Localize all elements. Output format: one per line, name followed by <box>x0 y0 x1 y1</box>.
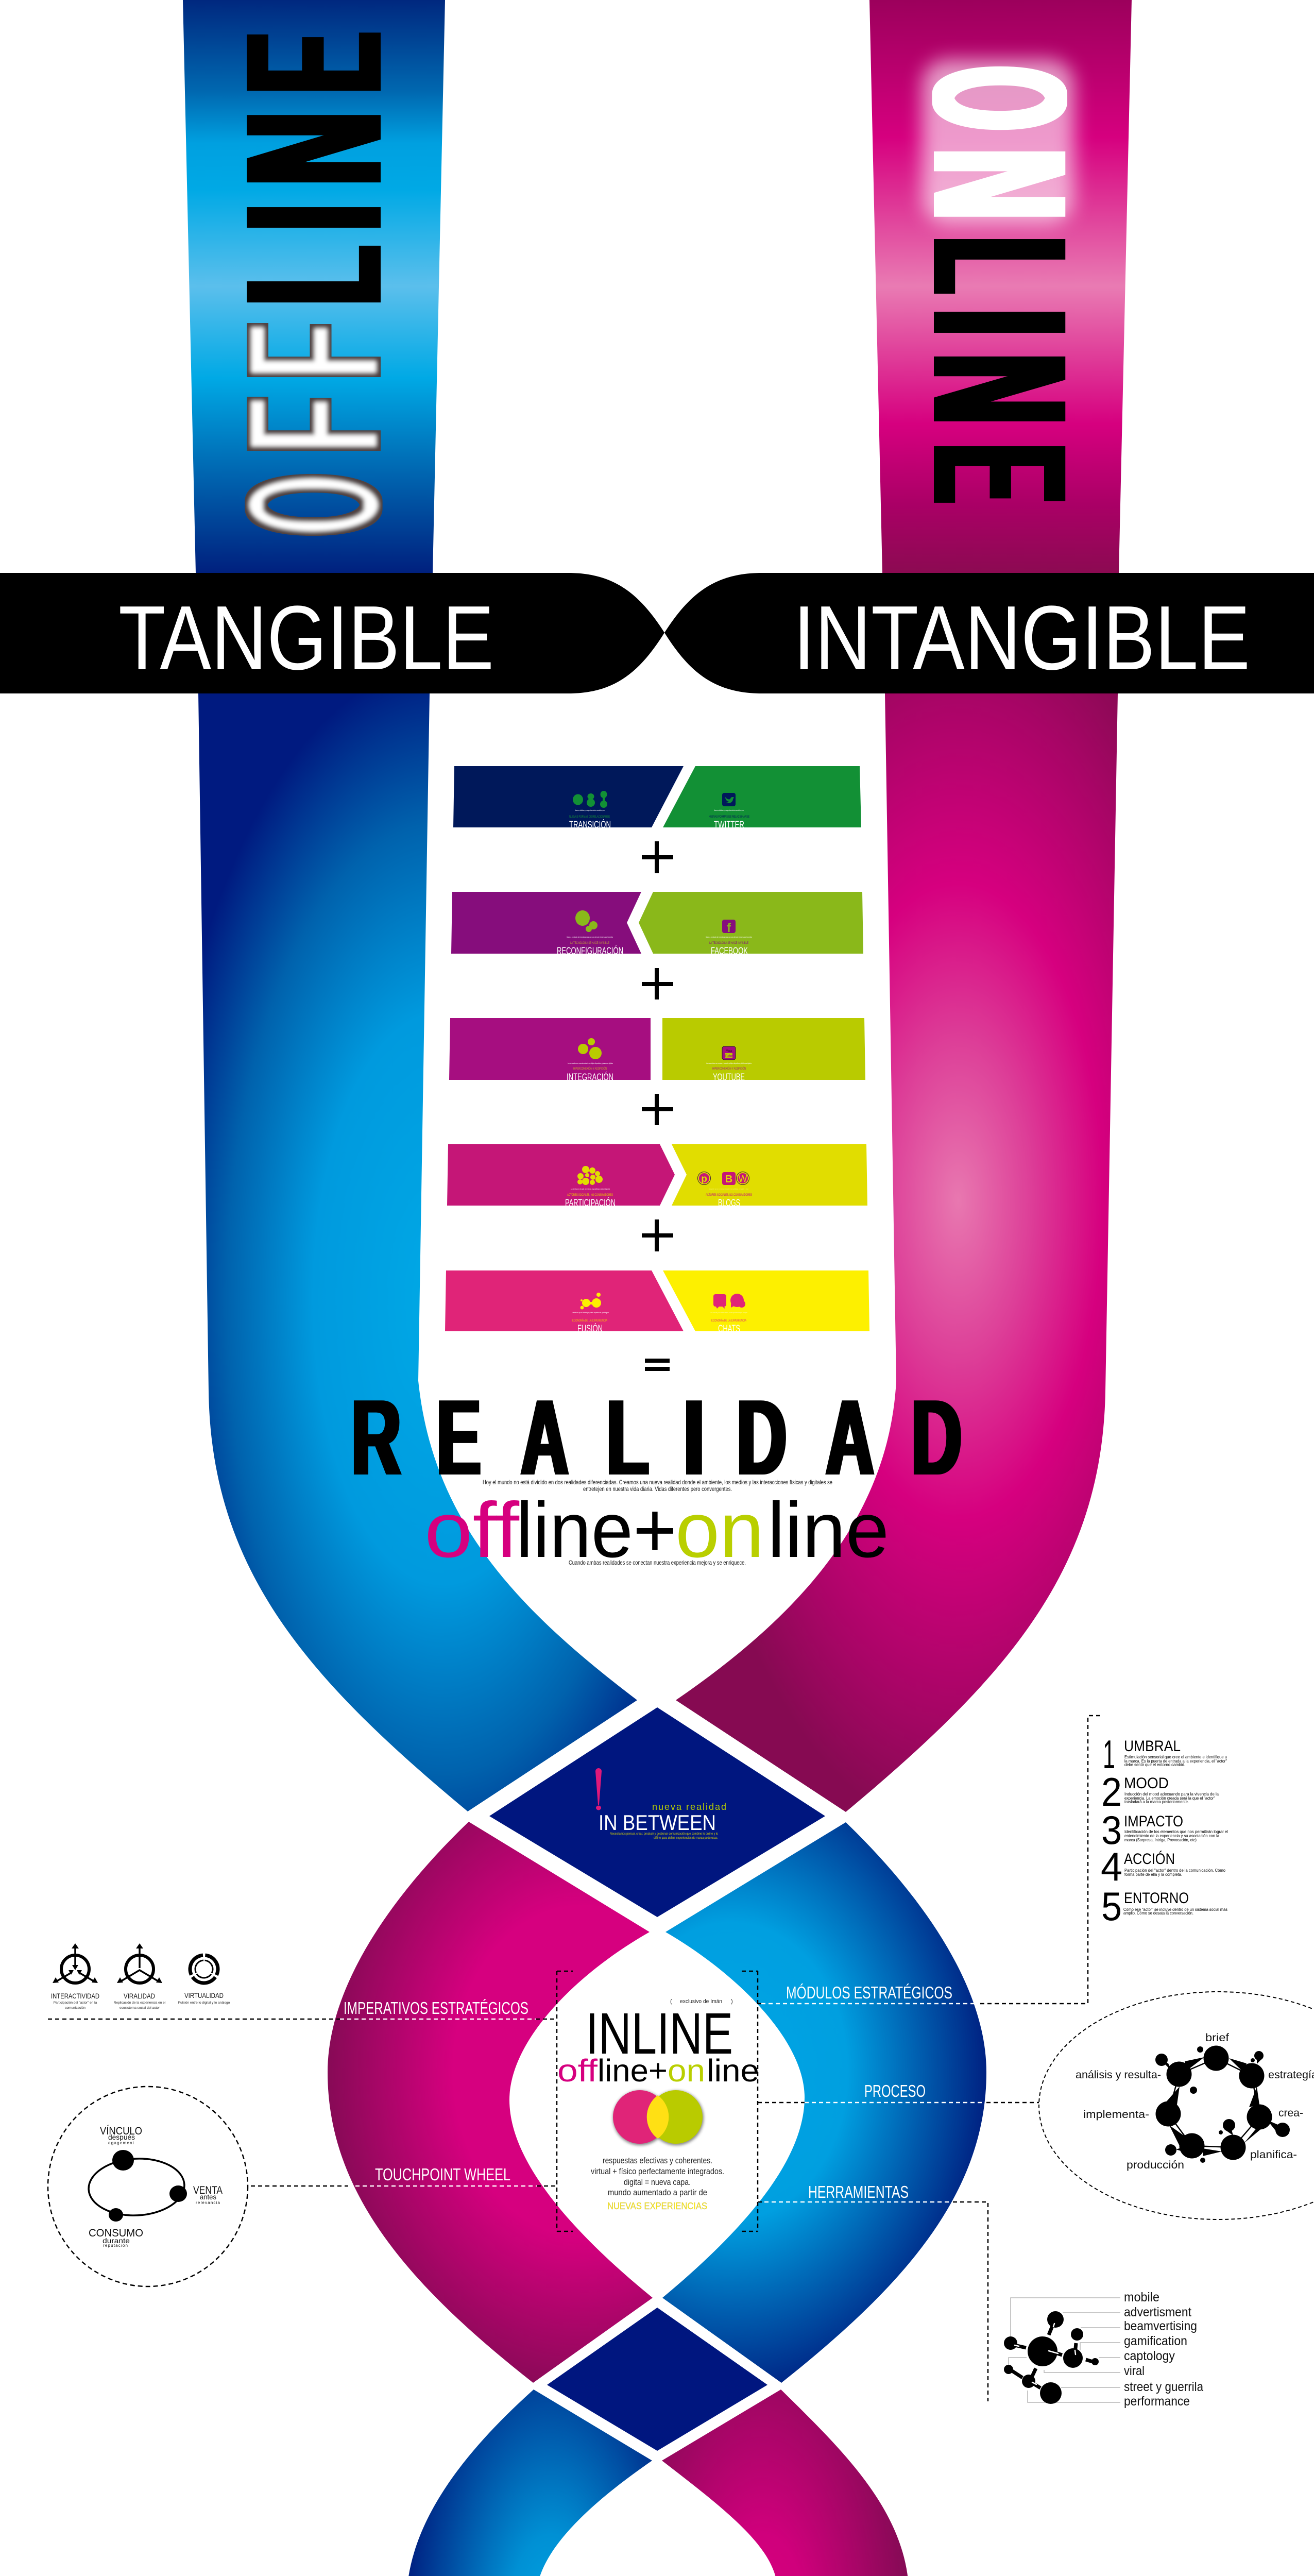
heading: LINE black: L <box>893 236 1107 293</box>
text: body right: La gente ya no es solo un receptor, hoy participa, comparte y crea <box>709 1188 748 1190</box>
text: body left: Los consumidores se conectan a través de múltiples dispositivos y plataformas digitales <box>568 1062 613 1064</box>
subheading left: HIPERCONEXIÓN Y ADOPCIÓN <box>573 1067 607 1071</box>
label: INTERACTIVIDAD: INTERACTIVIDAD <box>51 1992 99 2000</box>
text: body left: Nuevos hábitos y comportamientos sociales que <box>575 809 605 811</box>
heading: offline+online small: line+ <box>598 2053 668 2088</box>
heading: INLINE: INLINE <box>586 2001 733 2066</box>
item: impacto: entendimiento de la experiencia y su asociación con la <box>1124 1834 1219 1838</box>
subheading left: ACTORES SOCIALES, NO CONSUMIDORES <box>567 1194 613 1197</box>
heading: REALIDAD: I <box>683 1378 705 1498</box>
heading: REALIDAD: R <box>352 1378 401 1498</box>
heading: offline+online: line <box>767 1486 889 1574</box>
label: TOUCHPOINT WHEEL: TOUCHPOINT WHEEL <box>375 2165 510 2184</box>
panel: row 3 integración / youtube <box>449 1018 865 1083</box>
item: umbral: la marca. Es la puerta de entrada a la experiencia, el "actor" <box>1124 1759 1227 1764</box>
text: exclusivo de imán: ) <box>731 1998 733 2005</box>
item: entorno: Cómo ese "actor" se incluye dentro de un sistema social más <box>1123 1907 1227 1912</box>
item: mood: experiencia. La emoción creada será la que el "actor" <box>1124 1796 1215 1801</box>
operator: equals <box>645 1359 670 1371</box>
icon: twitter <box>722 793 736 806</box>
heading: offline+online small: on <box>668 2053 705 2088</box>
panel: center inline definition <box>557 1998 759 2211</box>
heading: OFF embossed: O <box>205 474 422 535</box>
item: mood: Inducción del mood adecuando para la vivencia de la <box>1124 1792 1219 1797</box>
heading: LINE black: L <box>205 246 422 306</box>
label: VÍNCULO: VÍNCULO <box>100 2125 142 2137</box>
subheading left: LA TECNOLOGÍA SE HACE INVISIBLE <box>570 941 609 945</box>
label: IN BETWEEN: IN BETWEEN <box>599 1810 716 1835</box>
labels: process steps: brief <box>1205 2032 1229 2044</box>
heading: offline+online: on <box>675 1486 764 1574</box>
icon: blogger <box>722 1172 736 1185</box>
panel: proceso diagram <box>1039 1992 1314 2219</box>
text: interactividad desc: Participación del "actor" en la <box>54 2001 97 2005</box>
icon: virtualidad <box>189 1954 219 1984</box>
subheading right: NUEVAS FORMAS DE RELACIONARSE <box>709 816 749 819</box>
labels: tools: viral <box>1124 2364 1145 2378</box>
label: TANGIBLE: TANGIBLE <box>118 587 494 689</box>
panel: small diamond <box>547 2308 767 2451</box>
label: MÓDULOS ESTRATÉGICOS: MÓDULOS ESTRATÉGICOS <box>786 1983 952 2002</box>
icon: blogger: B <box>725 1174 732 1185</box>
text: virtualidad desc: Pulsión entre lo digital y lo análogo <box>178 2001 230 2005</box>
heading: REALIDAD: E <box>437 1378 481 1498</box>
icon: viralidad <box>117 1943 162 1983</box>
labels: tools: gamification <box>1124 2334 1187 2348</box>
heading: LINE black: N <box>205 112 422 185</box>
heading: LINE black: I <box>205 205 422 230</box>
text: inline description <box>591 2156 724 2197</box>
text: inline description: digital = nueva capa. <box>624 2177 691 2187</box>
labels: tools: street y guerrila <box>1124 2380 1203 2394</box>
icon: chat round <box>730 1294 745 1308</box>
subheading left: ECONOMÍA DE LA EXPERIENCIA <box>572 1319 607 1323</box>
label: VÍNCULO: después <box>108 2133 135 2141</box>
icon: wordpress: W <box>739 1174 747 1184</box>
panel: pink U strand <box>676 693 1118 1812</box>
panel: row 2 reconfiguración / facebook <box>451 892 863 957</box>
subheading right: ACTORES SOCIALES, NO CONSUMIDORES <box>706 1194 752 1197</box>
text: body right: Los consumidores se conectan a través de múltiples dispositivos y plataformas digitales <box>706 1062 752 1064</box>
text: viralidad desc <box>114 2001 166 2010</box>
panel: offline bar <box>183 0 445 573</box>
item: acción: 4 <box>1101 1844 1122 1889</box>
subheading right: HIPERCONEXIÓN Y ADOPCIÓN <box>712 1067 746 1071</box>
heading: LINE black: N <box>893 353 1107 425</box>
chart: molecule <box>1004 2311 1099 2404</box>
heading: offline+online small: off <box>557 2053 598 2088</box>
text: body left: Las marcas ya no interrumpen, crean experiencias que integran <box>572 1312 609 1314</box>
text: exclusivo de imán: ( <box>670 1998 672 2005</box>
icon: transición <box>573 791 607 808</box>
label: CHATS: CHATS <box>718 1324 740 1334</box>
label: CONSUMO: durante <box>103 2236 130 2245</box>
label: VÍNCULO: egagement <box>108 2141 134 2145</box>
icon: youtube: You <box>726 1049 732 1053</box>
callout: nuevas experiencias: NUEVAS EXPERIENCIAS <box>607 2201 707 2211</box>
text: interactividad desc <box>54 2001 97 2010</box>
text: realidad intro: Hoy el mundo no está dividido en dos realidades diferenciadas. Creamos una nueva realidad donde el ambiente, los medios y las interacciones físicas y digitales se <box>483 1479 832 1486</box>
item: mood: trasladará a la marca posteriormente. <box>1124 1800 1189 1804</box>
icon: exclamation <box>595 1768 602 1810</box>
item: acción: ACCIÓN <box>1124 1851 1175 1868</box>
labels: tools: mobile <box>1124 2290 1159 2304</box>
panel: módulos list <box>1101 1732 1228 1929</box>
label: TWITTER: TWITTER <box>714 820 744 831</box>
labels: tools <box>1124 2290 1203 2409</box>
icon: facebook: f <box>727 921 731 935</box>
label: FUSIÓN: FUSIÓN <box>577 1323 603 1334</box>
label: INTEGRACIÓN: INTEGRACIÓN <box>567 1072 613 1083</box>
heading: REALIDAD: A <box>521 1378 569 1498</box>
label: BLOGS: BLOGS <box>718 1198 740 1209</box>
label: CONSUMO <box>89 2227 143 2248</box>
text: body right: Nuevos hábitos y comportamientos sociales que <box>714 809 744 811</box>
label: nueva realidad: nueva realidad <box>652 1802 726 1812</box>
panel: touchpoint wheel <box>48 2087 248 2286</box>
text: inline description: virtual + físico perfectamente integrados. <box>591 2166 724 2176</box>
label: VENTA: antes <box>200 2193 216 2201</box>
panel: row 1 transición / twitter <box>453 766 861 831</box>
label: YOUTUBE: YOUTUBE <box>713 1072 745 1083</box>
icon: participación <box>577 1166 603 1185</box>
labels: process steps: planifica- <box>1250 2149 1297 2161</box>
text: in between body: Necesitamos pensar, crear, producir y gestionar comunicación que combine lo online y lo <box>610 1832 718 1836</box>
icon: pinterest: p <box>701 1174 707 1184</box>
heading: REALIDAD: A <box>826 1378 874 1498</box>
labels: process steps <box>1076 2032 1314 2171</box>
text: viralidad desc: Replicación de la experiencia en el <box>114 2001 166 2005</box>
glow behind ON <box>922 59 1074 224</box>
icon: pinterest <box>697 1172 711 1185</box>
heading: REALIDAD: L <box>607 1378 649 1498</box>
labels: process steps: análisis y resulta- <box>1076 2069 1161 2081</box>
panel: offline bar: F <box>205 323 422 380</box>
item: umbral: UMBRAL <box>1124 1738 1181 1755</box>
item: umbral: 1 <box>1103 1732 1115 1777</box>
label: TRANSICIÓN: TRANSICIÓN <box>569 819 611 831</box>
item: entorno: ENTORNO <box>1124 1890 1189 1907</box>
text: body right: Las marcas ya no interrumpen, crean experiencias que integran <box>710 1312 747 1314</box>
text: in between body: offline para definir experiencias de marca poderosas. <box>654 1836 718 1840</box>
label: PROCESO: PROCESO <box>864 2081 926 2100</box>
label: VÍNCULO <box>100 2125 142 2145</box>
heading: offline+online: line+ <box>516 1486 677 1574</box>
labels: tools: captology <box>1124 2349 1175 2363</box>
item: impacto: Identificación de los elementos que nos permitirán lograr el <box>1124 1829 1228 1834</box>
item: entorno: amplio. Cómo se desata la conversación. <box>1123 1911 1193 1916</box>
item: mood <box>1101 1769 1219 1815</box>
heading: ON white: N <box>893 148 1107 220</box>
label: RECONFIGURACIÓN: RECONFIGURACIÓN <box>557 945 623 957</box>
text: body right: Gracias a la evolución de la tecnología, surge una nueva forma de entender y usar los medios <box>706 936 752 938</box>
panel: herramientas molecule <box>1004 2290 1203 2409</box>
labels: tools: advertisment <box>1124 2305 1191 2319</box>
label: VIRALIDAD: VIRALIDAD <box>124 1992 155 2000</box>
icon: integración <box>578 1038 602 1059</box>
item: impacto: IMPACTO <box>1124 1813 1183 1830</box>
text: realidad intro: entretejen en nuestra vida diaria. Vidas diferentes pero convergentes. <box>583 1485 732 1493</box>
label: FACEBOOK: FACEBOOK <box>711 946 748 957</box>
banner: tangible / intangible <box>0 573 1314 693</box>
text: in between body <box>610 1832 718 1840</box>
label: VIRTUALIDAD: VIRTUALIDAD <box>184 1992 224 1999</box>
labels: process steps: implementa- <box>1083 2109 1149 2121</box>
heading: ON white: O <box>893 66 1107 130</box>
panel: online bar: E <box>893 444 1107 503</box>
subheading left: NUEVAS FORMAS DE RELACIONARSE <box>569 816 610 819</box>
panel: pink lower strand <box>662 2389 909 2576</box>
panel: in between diamond <box>489 1707 825 1917</box>
labels: process steps: crea- <box>1278 2107 1303 2119</box>
operator: plus 2 <box>642 968 673 999</box>
text: viralidad desc: ecosistema social del actor <box>120 2006 160 2010</box>
panel: blue lower strand <box>406 2389 652 2576</box>
label: CONSUMO: CONSUMO <box>89 2227 143 2239</box>
panel: imperativos icons <box>51 1943 230 2010</box>
item: impacto: marca (Sorpresa, Intriga, Provocación, etc) <box>1124 1838 1197 1842</box>
chart: process ring <box>1155 2045 1290 2163</box>
label: VENTA: VENTA <box>193 2184 223 2196</box>
operator: plus 1 <box>642 841 673 873</box>
heading: REALIDAD: D <box>911 1378 962 1498</box>
heading: OFF embossed: F <box>205 397 422 453</box>
item: mood: MOOD <box>1124 1775 1169 1792</box>
item: entorno <box>1101 1884 1227 1929</box>
item: acción <box>1101 1844 1225 1889</box>
panel: blue U strand <box>198 693 637 1811</box>
text: interactividad desc: comunicación <box>65 2006 86 2010</box>
text: inline description: mundo aumentado a partir de <box>608 2188 707 2197</box>
panel: pink middle strand <box>328 1822 653 2383</box>
label: IMPERATIVOS ESTRATÉGICOS: IMPERATIVOS ESTRATÉGICOS <box>344 1998 528 2018</box>
panel: online bar <box>869 0 1132 573</box>
icon: interactividad <box>53 1943 98 1983</box>
icon: facebook <box>722 920 736 935</box>
text: body left: La gente ya no es solo un receptor, hoy participa, comparte y crea <box>571 1188 610 1190</box>
item: acción: Participación del "actor" dentro de la comunicación. Cómo <box>1124 1868 1225 1873</box>
icon: chat square <box>713 1294 726 1309</box>
item: entorno: 5 <box>1101 1884 1122 1929</box>
icon: venn diagram <box>613 2090 704 2145</box>
item: impacto: 3 <box>1101 1807 1122 1853</box>
subheading right: LA TECNOLOGÍA SE HACE INVISIBLE <box>709 941 748 945</box>
item: impacto <box>1101 1807 1228 1853</box>
operator: plus 3 <box>642 1094 673 1125</box>
item: umbral: Estimulación sensorial que cree el ambiente e identifique a <box>1124 1755 1227 1759</box>
label: INTANGIBLE: INTANGIBLE <box>793 587 1250 689</box>
label: PARTICIPACIÓN: PARTICIPACIÓN <box>565 1197 616 1209</box>
icon: youtube: Tube <box>725 1055 733 1058</box>
item: umbral <box>1103 1732 1227 1777</box>
labels: tools: beamvertising <box>1124 2319 1197 2333</box>
text: realidad closing: Cuando ambas realidades se conectan nuestra experiencia mejora y se enriquece. <box>569 1559 746 1566</box>
heading: offline+online small: line <box>707 2053 759 2088</box>
text: body left: Gracias a la evolución de la tecnología, surge una nueva forma de entender y usar los medios <box>567 936 613 938</box>
icon: fusión <box>580 1293 601 1310</box>
text: exclusivo de imán: exclusivo de Imán <box>680 1998 722 2005</box>
heading: REALIDAD: D <box>737 1378 787 1498</box>
heading: offline+online: off <box>424 1486 520 1574</box>
label: HERRAMIENTAS: HERRAMIENTAS <box>808 2182 909 2201</box>
label: VENTA <box>193 2184 223 2205</box>
icon: youtube <box>722 1046 736 1060</box>
icon: reconfiguración <box>575 910 598 932</box>
subheading right: ECONOMÍA DE LA EXPERIENCIA <box>711 1319 746 1323</box>
icon: wordpress <box>737 1172 749 1185</box>
operator: plus 4 <box>642 1219 673 1251</box>
item: acción: forma parte de ella y la completa. <box>1124 1872 1182 1877</box>
panel: row 5 fusión / chats <box>445 1270 869 1334</box>
label: CONSUMO: reputación <box>103 2243 128 2248</box>
label: VENTA: relevancia <box>196 2200 220 2205</box>
leader lines <box>1009 2298 1120 2402</box>
connector lines dashed <box>48 1716 1103 2401</box>
panel: row 4 participación / blogs <box>447 1144 867 1209</box>
heading: LINE black: I <box>893 309 1107 336</box>
labels: process steps: producción <box>1127 2159 1184 2171</box>
item: mood: 2 <box>1101 1769 1122 1815</box>
text: realidad intro <box>483 1479 832 1493</box>
labels: tools: performance <box>1124 2394 1190 2409</box>
item: umbral: debe sentir que el entorno cambió. <box>1124 1762 1185 1767</box>
chart: wheel ring <box>87 2150 187 2222</box>
panel: blue middle strand <box>662 1822 986 2383</box>
text: inline description: respuestas efectivas y coherentes. <box>603 2156 712 2165</box>
